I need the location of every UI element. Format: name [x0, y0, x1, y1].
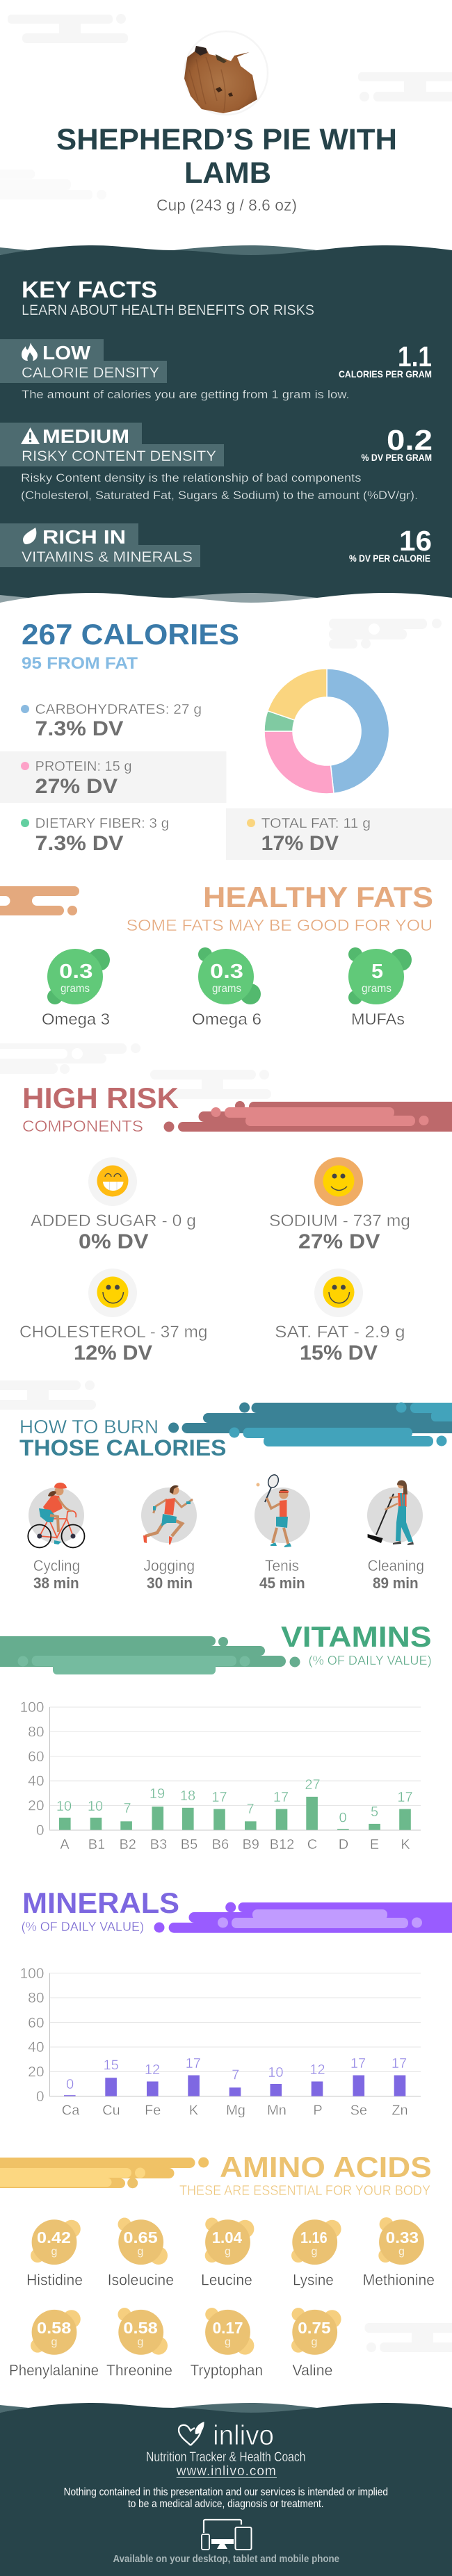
decorative cloud: top left	[8, 14, 128, 43]
chart: vitamins bar chart: 7	[246, 1802, 255, 1817]
chart: minerals bar chart: Mn	[267, 2103, 286, 2119]
availability note: Available on your desktop, tablet and mobile phone	[113, 2553, 339, 2565]
legend: protein: 27% DV	[35, 775, 118, 798]
icon: warning triangle	[21, 427, 40, 444]
legend: carbohydrates: 7.3% DV	[35, 717, 124, 740]
amino acid: methionine: Methionine	[363, 2272, 435, 2289]
icon: smiling face on orange	[314, 1157, 363, 1206]
value: calorie density: 1.1	[398, 341, 432, 373]
food image	[184, 31, 268, 115]
amino acid: lysine: 1.16	[300, 2228, 328, 2247]
decorative band: minerals	[154, 1902, 452, 1933]
amino acid: isoleucine: g	[138, 2246, 143, 2258]
amino acid: lysine	[291, 2219, 341, 2289]
decorative cloud: calories	[329, 619, 442, 649]
risk: sodium	[269, 1157, 410, 1253]
chart: minerals bar chart: 0	[36, 2089, 45, 2105]
chart: vitamins bar chart: 0	[339, 1810, 347, 1825]
chart: vitamins bar chart: B2	[119, 1837, 136, 1852]
chart: minerals bar chart: 40	[28, 2039, 45, 2055]
chart: vitamins bar chart: 17	[273, 1790, 289, 1805]
activity: jogging	[141, 1485, 197, 1592]
activity: cycling: Cycling	[33, 1557, 80, 1574]
amino acid: threonine: g	[138, 2336, 143, 2348]
chart: vitamins bar chart: 10	[56, 1799, 72, 1814]
amino acid: tryptophan: g	[225, 2336, 231, 2348]
chart: vitamins bar chart: 27	[305, 1777, 321, 1793]
chart: vitamins bar chart: 18	[180, 1788, 195, 1804]
chart: vitamins bar chart: 19	[150, 1786, 165, 1802]
amino acid: methionine: 0.33	[386, 2228, 419, 2247]
activity: cleaning: Cleaning	[368, 1557, 424, 1574]
chart: minerals bar chart: 12	[309, 2062, 325, 2078]
disclaimer: to be a medical advice, diagnosis or treatment.	[128, 2498, 324, 2510]
activity: cycling	[28, 1483, 84, 1592]
disclaimer: Nothing contained in this presentation and our services is intended or implied	[64, 2486, 388, 2498]
amino acid: isoleucine	[108, 2217, 174, 2289]
amino acid: methionine	[363, 2217, 435, 2289]
legend: protein: PROTEIN: 15 g	[35, 759, 132, 774]
risk: added sugar: ADDED SUGAR - 0 g	[31, 1212, 196, 1230]
chart: minerals bar chart: 15	[103, 2057, 119, 2073]
fat: omega 3: grams	[60, 983, 90, 995]
tag: rich in vitamins and minerals	[0, 523, 200, 567]
amino acid: histidine: 0.42	[37, 2228, 71, 2247]
value: dv per calorie: % DV PER CALORIE	[349, 553, 430, 564]
text: risky content explanation	[21, 471, 418, 502]
value: dv per calorie	[349, 525, 432, 564]
amino acid: methionine: g	[398, 2246, 405, 2258]
activity: cleaning	[367, 1480, 424, 1592]
title: SHEPHERD’S PIE WITH	[56, 123, 397, 156]
icon: smiling face	[88, 1269, 137, 1317]
subheading: percent of daily value: (% OF DAILY VALUE)	[22, 1920, 144, 1934]
fat: omega 6	[192, 947, 261, 1028]
amino acid: leucine: Leucine	[201, 2272, 252, 2289]
risk: added sugar	[31, 1157, 196, 1253]
chart: vitamins bar chart: 10	[88, 1799, 103, 1814]
amino acid: isoleucine: Isoleucine	[108, 2272, 174, 2289]
fat: mufas: 5	[371, 961, 383, 983]
decorative band: healthy fats	[0, 886, 88, 915]
chart: minerals bar chart: 10	[268, 2065, 284, 2080]
activity: jogging: Jogging	[143, 1557, 195, 1574]
amino acid: leucine	[201, 2217, 254, 2289]
decorative band: vitamins	[0, 1636, 300, 1674]
value: risky content density: 0.2	[387, 424, 433, 456]
value: risky content density: % DV PER GRAM	[362, 452, 432, 463]
risk: saturated fat	[275, 1269, 405, 1364]
fat: omega 6: 0.3	[210, 961, 243, 983]
tag: medium risky content density: RISKY CONTENT DENSITY	[22, 448, 216, 464]
chart: minerals bar chart: 80	[28, 1990, 45, 2006]
website link: www.inlivo.com	[176, 2464, 276, 2479]
fat: omega 6: Omega 6	[192, 1010, 261, 1028]
amino acid: lysine: g	[312, 2246, 317, 2258]
heading: minerals: MINERALS	[22, 1886, 179, 1919]
icon: smiling face	[314, 1269, 363, 1317]
amino acid: tryptophan	[191, 2308, 263, 2379]
chart: minerals bar chart: Ca	[62, 2103, 80, 2119]
chart: vitamins bar chart: 40	[28, 1773, 45, 1789]
risk: sodium: 27% DV	[298, 1230, 380, 1253]
chart: minerals bar chart: 17	[350, 2056, 366, 2071]
amino acid: phenylalanine: g	[51, 2336, 57, 2348]
decorative band: high risk	[164, 1101, 452, 1132]
chart: vitamins bar chart: B5	[181, 1837, 197, 1852]
chart: vitamins bar chart: 5	[371, 1804, 378, 1820]
decorative cloud: above high risk left	[0, 1043, 140, 1074]
decorative cloud: left of title	[0, 170, 106, 199]
fat: omega 3: 0.3	[59, 961, 93, 983]
fat: omega 6: grams	[212, 983, 241, 995]
chart: minerals bar chart: 60	[28, 2015, 45, 2031]
amino acid: valine	[291, 2308, 341, 2379]
amino acid: isoleucine: 0.65	[123, 2228, 158, 2247]
subheading: components: COMPONENTS	[22, 1117, 143, 1135]
chart: minerals bar chart: Mg	[226, 2103, 245, 2119]
risk: cholesterol	[19, 1269, 207, 1364]
chart: vitamins bar chart: K	[401, 1837, 410, 1852]
subheading: amino acids: THESE ARE ESSENTIAL FOR YOUR BODY	[179, 2183, 430, 2199]
text: risky content explanation: (Cholesterol, Saturated Fat, Sugars & Sodium) to the amount (%DV/gr).	[21, 489, 418, 502]
legend: total fat: 17% DV	[261, 832, 339, 855]
amino acid: phenylalanine: 0.58	[37, 2319, 71, 2337]
chart: vitamins bar chart: 80	[28, 1724, 45, 1741]
chart: vitamins bar chart: 100	[19, 1699, 45, 1715]
icon: cyclist	[28, 1483, 84, 1547]
chart: vitamins bar chart: E	[370, 1837, 379, 1852]
chart: vitamins bar chart: D	[339, 1837, 348, 1852]
tag: low calorie density	[0, 339, 167, 383]
chart: vitamins bar chart: 17	[397, 1790, 413, 1805]
bottom wave	[0, 593, 452, 608]
legend: protein	[0, 751, 227, 803]
chart: vitamins bar chart: 60	[28, 1749, 45, 1765]
chart: minerals bar chart: 0	[66, 2077, 74, 2092]
fat: omega 3: Omega 3	[42, 1010, 110, 1028]
fat: mufas: MUFAs	[351, 1010, 405, 1028]
risk: cholesterol: CHOLESTEROL - 37 mg	[19, 1323, 207, 1342]
fat: mufas: grams	[362, 983, 392, 995]
chart: vitamins bar chart: B9	[242, 1837, 259, 1852]
heading: those calories: THOSE CALORIES	[19, 1435, 227, 1460]
amino acid: tryptophan: Tryptophan	[191, 2362, 263, 2379]
tag: low calorie density: CALORIE DENSITY	[22, 364, 159, 381]
chart: minerals bar chart	[19, 1966, 421, 2119]
value: risky content density	[362, 424, 433, 463]
chart: minerals bar chart: Cu	[102, 2103, 120, 2119]
decorative cloud: top right	[358, 72, 452, 101]
risk: cholesterol: 12% DV	[74, 1342, 152, 1364]
tag: medium risky content density	[0, 423, 224, 466]
fat: mufas	[348, 947, 412, 1028]
chart: minerals bar chart: Fe	[145, 2103, 161, 2119]
icon: inlivo heart logo	[179, 2422, 204, 2445]
chart: vitamins bar chart: A	[60, 1837, 70, 1852]
heading: vitamins: VITAMINS	[281, 1620, 432, 1653]
legend: dietary fiber: 7.3% DV	[35, 832, 124, 855]
amino acid: threonine: 0.58	[123, 2319, 158, 2337]
logo wordmark: inlivo	[213, 2420, 274, 2451]
subheading: calories from fat: 95 FROM FAT	[22, 654, 138, 673]
title	[56, 123, 397, 190]
subheading: LEARN ABOUT HEALTH BENEFITS OR RISKS	[22, 302, 314, 318]
legend: total fat	[226, 808, 452, 860]
chart: vitamins bar chart: B1	[88, 1837, 105, 1852]
heading: healthy fats: HEALTHY FATS	[203, 881, 433, 913]
chart: minerals bar chart: P	[313, 2103, 323, 2119]
chart: minerals bar chart: 17	[186, 2056, 201, 2071]
amino acid: leucine: g	[225, 2246, 231, 2258]
tag: medium risky content density: MEDIUM	[42, 425, 129, 447]
panel: key facts	[0, 245, 452, 608]
amino acid: tryptophan: 0.17	[213, 2319, 243, 2337]
amino acid: valine: 0.75	[298, 2319, 331, 2337]
legend: carbohydrates	[21, 702, 202, 740]
legend: carbohydrates: CARBOHYDRATES: 27 g	[35, 702, 202, 717]
chart: vitamins bar chart: 7	[123, 1801, 131, 1816]
chart: minerals bar chart: 100	[19, 1966, 45, 1982]
activity: cleaning: 89 min	[373, 1574, 419, 1592]
amino acid: valine: g	[312, 2336, 317, 2348]
icon: jogger	[141, 1485, 197, 1544]
value: calorie density: CALORIES PER GRAM	[339, 368, 432, 380]
decorative cloud: above high risk centre	[150, 1070, 271, 1099]
legend: dietary fiber	[21, 816, 169, 855]
risk: saturated fat: 15% DV	[300, 1342, 378, 1364]
fat: omega 3	[42, 949, 110, 1028]
amino acid: phenylalanine	[9, 2310, 99, 2379]
footer wave	[0, 2403, 452, 2576]
icon: person sweeping	[367, 1480, 423, 1545]
text: risky content explanation: Risky Content density is the relationship of bad components	[21, 471, 362, 484]
chart: vitamins bar chart: B6	[212, 1837, 229, 1852]
chart: vitamins bar chart: 20	[28, 1798, 45, 1814]
chart: vitamins bar chart: B3	[150, 1837, 167, 1852]
amino acid: lysine: Lysine	[293, 2272, 334, 2289]
top wave	[0, 245, 452, 605]
amino acid: threonine	[106, 2308, 172, 2379]
chart: minerals bar chart: 7	[232, 2068, 239, 2083]
amino acid: histidine: Histidine	[26, 2272, 83, 2289]
chart: vitamins bar chart: 0	[36, 1823, 45, 1839]
chart: minerals bar chart: 12	[145, 2062, 160, 2078]
subheading: healthy fats: SOME FATS MAY BE GOOD FOR YOU	[127, 916, 433, 934]
tagline: Nutrition Tracker & Health Coach	[146, 2450, 306, 2465]
activity: tennis	[255, 1474, 310, 1592]
chart: vitamins bar chart: B12	[270, 1837, 294, 1852]
legend: dietary fiber: DIETARY FIBER: 3 g	[35, 816, 169, 831]
amino acid: valine: Valine	[292, 2362, 332, 2379]
icon: flame	[22, 343, 38, 361]
subheading: percent of daily value: (% OF DAILY VALUE)	[309, 1654, 432, 1668]
icon: leaf	[23, 528, 36, 544]
amino acid: phenylalanine: Phenylalanine	[9, 2362, 99, 2379]
amino acid: histidine	[26, 2219, 83, 2289]
icon: tennis player	[255, 1474, 310, 1547]
decorative band: burn calories	[168, 1403, 452, 1446]
text: calorie density explanation: The amount of calories you are getting from 1 gram is low.	[22, 388, 350, 401]
chart: minerals bar chart: Zn	[392, 2103, 408, 2119]
activity: tennis: Tenis	[265, 1557, 299, 1574]
icon: devices	[202, 2520, 252, 2550]
amino acid: leucine: 1.04	[212, 2228, 242, 2247]
amino acid: threonine: Threonine	[106, 2362, 172, 2379]
chart: macronutrient donut	[264, 669, 389, 794]
tag: low calorie density: LOW	[42, 342, 91, 364]
decorative cloud: right of amino acids	[364, 2323, 452, 2352]
heading: high risk: HIGH RISK	[22, 1082, 179, 1114]
risk: sodium: SODIUM - 737 mg	[269, 1212, 410, 1230]
heading: how to burn: HOW TO BURN	[19, 1416, 159, 1437]
chart: minerals bar chart: 20	[28, 2064, 45, 2080]
chart: vitamins bar chart: 17	[211, 1790, 227, 1805]
heading: calories: 267 CALORIES	[22, 618, 239, 651]
serving size: Cup (243 g / 8.6 oz)	[156, 196, 297, 214]
decorative band: amino acids	[0, 2158, 209, 2188]
tag: rich in vitamins and minerals: VITAMINS & MINERALS	[22, 548, 193, 565]
icon: grinning face	[88, 1157, 137, 1206]
heading: key facts: KEY FACTS	[22, 277, 157, 302]
chart: minerals bar chart: K	[189, 2103, 199, 2119]
title: LAMB	[184, 156, 271, 190]
panel: footer	[0, 2403, 452, 2576]
activity: cycling: 38 min	[33, 1574, 79, 1592]
chart: minerals bar chart: Se	[350, 2103, 367, 2119]
disclaimer	[64, 2486, 388, 2510]
activity: jogging: 30 min	[147, 1574, 193, 1592]
activity: tennis: 45 min	[259, 1574, 305, 1592]
chart: vitamins bar chart	[19, 1699, 421, 1852]
chart: minerals bar chart: 17	[392, 2056, 407, 2071]
legend: total fat: TOTAL FAT: 11 g	[261, 816, 371, 831]
chart: vitamins bar chart: C	[307, 1837, 317, 1852]
tag: rich in vitamins and minerals: RICH IN	[42, 526, 126, 548]
decorative cloud: left of burn	[0, 1380, 96, 1410]
value: dv per calorie: 16	[399, 525, 432, 557]
heading: amino acids: AMINO ACIDS	[220, 2151, 432, 2183]
risk: added sugar: 0% DV	[79, 1230, 149, 1253]
value: calorie density	[339, 341, 432, 380]
risk: saturated fat: SAT. FAT - 2.9 g	[275, 1323, 405, 1342]
amino acid: histidine: g	[51, 2246, 57, 2258]
